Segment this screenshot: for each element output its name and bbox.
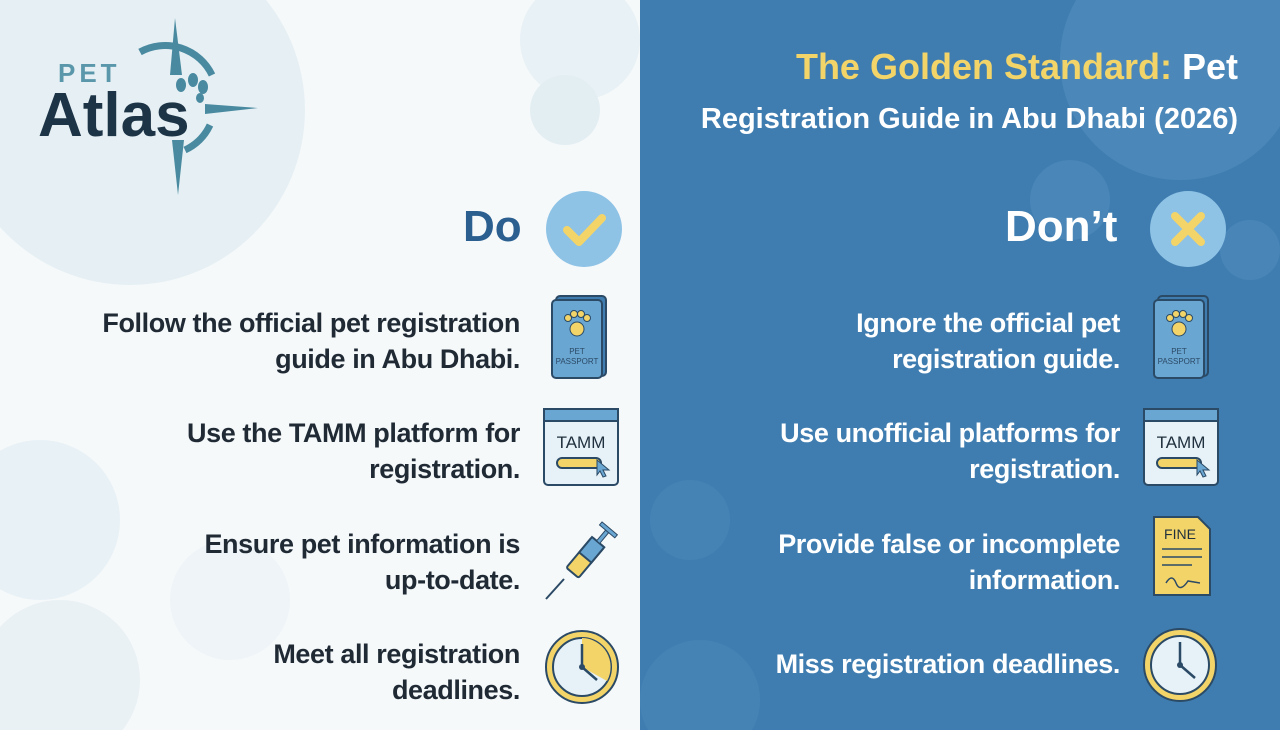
icon: TAMM (dont): TAMM <box>1157 433 1205 452</box>
icon: passport (dont): PASSPORT <box>1158 357 1201 366</box>
dont 3: information. <box>969 565 1120 595</box>
do 3: Ensure pet information is <box>204 529 520 559</box>
do 4 <box>273 639 520 705</box>
dont 2: registration. <box>969 454 1120 484</box>
logo <box>38 18 258 195</box>
logo: Atlas <box>38 81 190 150</box>
icon: fine document <box>1153 516 1211 596</box>
heading: Do <box>463 191 622 267</box>
do 4: deadlines. <box>392 675 520 705</box>
dont 1: registration guide. <box>892 344 1120 374</box>
dont list <box>776 308 1120 679</box>
dont 2: Use unofficial platforms for <box>780 418 1120 448</box>
dont 1: Ignore the official pet <box>856 308 1120 338</box>
do 2 <box>187 418 520 484</box>
icon: passport (do): PASSPORT <box>556 357 599 366</box>
logo: PET <box>58 58 121 88</box>
dont 1 <box>856 308 1120 374</box>
title: The Golden Standard: Pet <box>796 46 1238 87</box>
heading: Don't <box>1005 191 1226 267</box>
heading: Do: Do <box>463 202 522 251</box>
dont 3 <box>778 529 1120 595</box>
do 3 <box>204 529 520 595</box>
icon: passport (dont) <box>1153 295 1209 379</box>
icon: passport (do) <box>551 295 607 379</box>
dont 3: Provide false or incomplete <box>778 529 1120 559</box>
icon: TAMM (do): TAMM <box>557 433 605 452</box>
icon: passport (do): PET <box>569 347 585 356</box>
title <box>701 46 1238 135</box>
title: Registration Guide in Abu Dhabi (2026) <box>701 103 1238 135</box>
do 2: registration. <box>369 454 520 484</box>
do 3: up-to-date. <box>385 565 520 595</box>
icon: fine document: FINE <box>1164 526 1196 542</box>
heading: Don't: Don’t <box>1005 202 1117 251</box>
do 1 <box>102 308 520 374</box>
icon: clock (do) <box>545 630 619 704</box>
dont 2 <box>780 418 1120 484</box>
icon: clock (dont) <box>1143 628 1217 702</box>
do 4: Meet all registration <box>273 639 520 669</box>
do 2: Use the TAMM platform for <box>187 418 520 448</box>
icon: TAMM (do) <box>543 408 619 486</box>
icon: TAMM (dont) <box>1143 408 1219 486</box>
do 1: Follow the official pet registration <box>102 308 520 338</box>
do list <box>102 308 520 705</box>
dont 4: Miss registration deadlines. <box>776 649 1120 679</box>
icon: passport (dont): PET <box>1171 347 1187 356</box>
do 1: guide in Abu Dhabi. <box>275 344 520 374</box>
icon: syringe <box>545 521 618 600</box>
